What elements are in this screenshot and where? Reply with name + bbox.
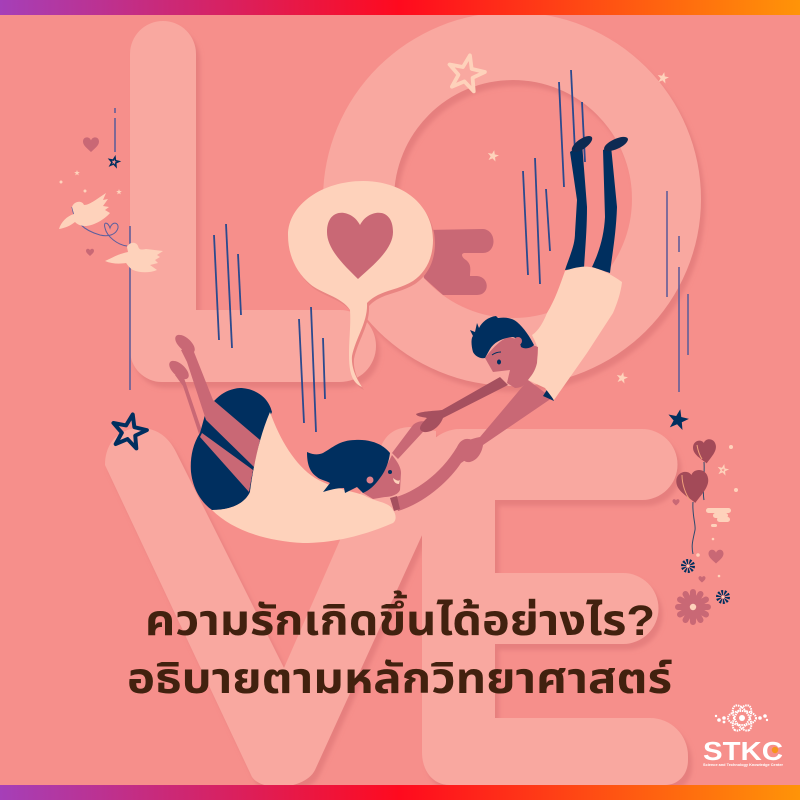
man far arm: [416, 377, 508, 432]
man front leg: [565, 143, 587, 270]
letter E: [422, 429, 688, 785]
woman smile: [393, 478, 400, 484]
hearts small right: [672, 499, 724, 582]
speech bubble with heart: [288, 181, 435, 390]
hearts small left: [83, 137, 99, 256]
heart: [327, 213, 393, 279]
logo tagline: Science and Technology Knowledge Center: [703, 762, 783, 767]
title: [127, 590, 673, 703]
woman lower arm: [393, 439, 474, 511]
back foot: [166, 358, 192, 382]
title line 1: ความรักเกิดขึ้นได้อย่างไร?: [145, 590, 655, 645]
man figure: [416, 133, 630, 462]
man near arm: [457, 380, 552, 462]
logo wordmark: STKC: [703, 736, 783, 766]
letters LOVE background: [105, 12, 701, 787]
small cream stars: [60, 71, 738, 577]
skirt: [191, 388, 272, 510]
man ear: [514, 337, 522, 345]
bubble: [288, 181, 433, 387]
top gradient bar: [0, 0, 800, 15]
letter L: [130, 21, 376, 382]
leg back over skirt: [200, 433, 253, 492]
sleeve: [390, 496, 400, 511]
woman body: [212, 412, 396, 543]
navy flowers: [684, 562, 728, 602]
logo dots: [715, 714, 768, 723]
outline star cream: [445, 52, 488, 93]
highlights: [682, 445, 702, 500]
title line 2: อธิบายตามหลักวิทยาศาสตร์: [127, 655, 673, 703]
bubble shadow: [290, 184, 435, 390]
woman face: [363, 455, 401, 499]
man hair: [470, 316, 534, 358]
balloon top: [692, 438, 718, 465]
doves with heart string: [59, 193, 163, 272]
balloon strings: [692, 462, 704, 554]
outline star navy: [109, 411, 149, 450]
small outline star navy: [109, 156, 120, 167]
logo orange dot: [772, 747, 778, 753]
man back leg: [592, 146, 617, 273]
woman figure: [166, 332, 474, 543]
letter O: [323, 12, 701, 386]
rose flower: [678, 592, 708, 622]
man eyebrow: [492, 352, 501, 355]
STKC logo: [703, 702, 783, 767]
string: [72, 207, 127, 246]
front foot: [172, 332, 198, 356]
woman ear: [366, 476, 374, 484]
shoe right: [602, 134, 630, 154]
shoe left: [569, 133, 595, 155]
heart balloons: [675, 438, 718, 554]
letter V: [105, 427, 436, 787]
dove left: [59, 193, 110, 229]
woman upper arm: [392, 421, 428, 459]
legs back: [175, 372, 253, 492]
bottom gradient bar: [0, 785, 800, 800]
sleeve edge: [543, 388, 554, 401]
man eye: [497, 360, 501, 364]
small outline star right: [719, 465, 728, 474]
woman eye: [388, 470, 392, 474]
vertical side lines: [115, 108, 688, 392]
navy flower centres: [687, 565, 724, 598]
dove right: [105, 243, 163, 272]
woman hair: [307, 440, 390, 493]
man shirt: [528, 267, 622, 400]
leg front: [181, 346, 260, 467]
falling motion lines: [214, 70, 585, 432]
cream cloud: [706, 508, 731, 527]
solid star navy: [666, 407, 691, 431]
man face: [485, 337, 538, 388]
balloon bottom: [675, 469, 711, 505]
wing shape behind speech bubble: [424, 229, 494, 295]
atom icon: [728, 702, 756, 734]
